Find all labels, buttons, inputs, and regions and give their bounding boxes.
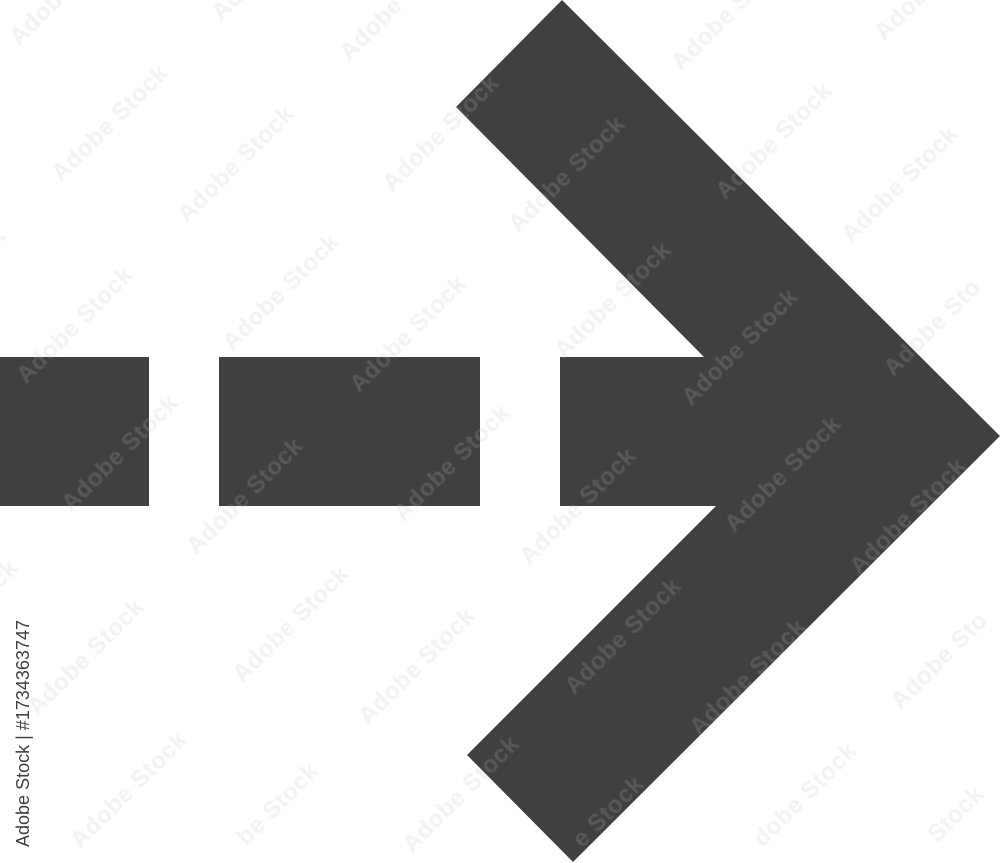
stock watermark pattern: Adobe Stock xyxy=(22,593,150,721)
stock watermark pattern: Adobe Stock xyxy=(217,228,345,356)
stock watermark pattern: Adobe Stock xyxy=(353,602,481,730)
stock watermark pattern: e Stock xyxy=(567,770,650,853)
stock watermark pattern: Adobe Sto xyxy=(878,274,986,382)
stock watermark pattern: Adobe Stock xyxy=(11,261,139,389)
stock watermark pattern: Adobe Stock xyxy=(397,730,525,858)
stock watermark pattern: Stock xyxy=(922,780,990,848)
stock watermark pattern: Adobe Stock xyxy=(710,77,838,205)
stock watermark pattern: Adobe Stock xyxy=(388,399,516,527)
stock watermark pattern: Adobe Stock xyxy=(549,236,677,364)
stock watermark pattern: Adobe Stock xyxy=(377,69,505,197)
stock watermark pattern: Adobe Stock xyxy=(836,120,964,248)
stock watermark pattern: Adobe Stock xyxy=(844,452,972,580)
stock watermark pattern: Adobe Stock xyxy=(684,613,812,741)
stock watermark pattern: Adobe Stock xyxy=(227,560,355,688)
stock watermark pattern: Adobe Sto xyxy=(885,607,993,715)
stock watermark pattern: Adobe Stock xyxy=(56,389,184,517)
stock attribution label: Adobe Stock | #1734363747 xyxy=(13,620,33,847)
arrow head with attached shaft xyxy=(456,0,1000,862)
stock watermark pattern: dobe Stock xyxy=(748,737,863,852)
stock watermark pattern: Adobe Stock xyxy=(719,410,847,538)
arrow dash: left xyxy=(0,357,149,506)
stock watermark pattern: Adobe Stock xyxy=(344,270,472,398)
arrow dash: middle xyxy=(219,357,480,506)
stock watermark pattern: Adobe Stock xyxy=(172,100,300,228)
stock watermark pattern: Adobe Stock xyxy=(559,572,687,700)
stock watermark pattern: Adobe Stock xyxy=(181,432,309,560)
stock watermark pattern: Adobe Stock xyxy=(514,442,642,570)
stock watermark pattern: Adobe Stock xyxy=(503,110,631,238)
stock watermark pattern: be Stock xyxy=(231,757,325,851)
stock watermark pattern: Adobe Stock xyxy=(65,726,193,854)
stock watermark pattern: Adobe Stock xyxy=(676,283,804,411)
stock watermark pattern: Adobe Stock xyxy=(46,59,174,187)
